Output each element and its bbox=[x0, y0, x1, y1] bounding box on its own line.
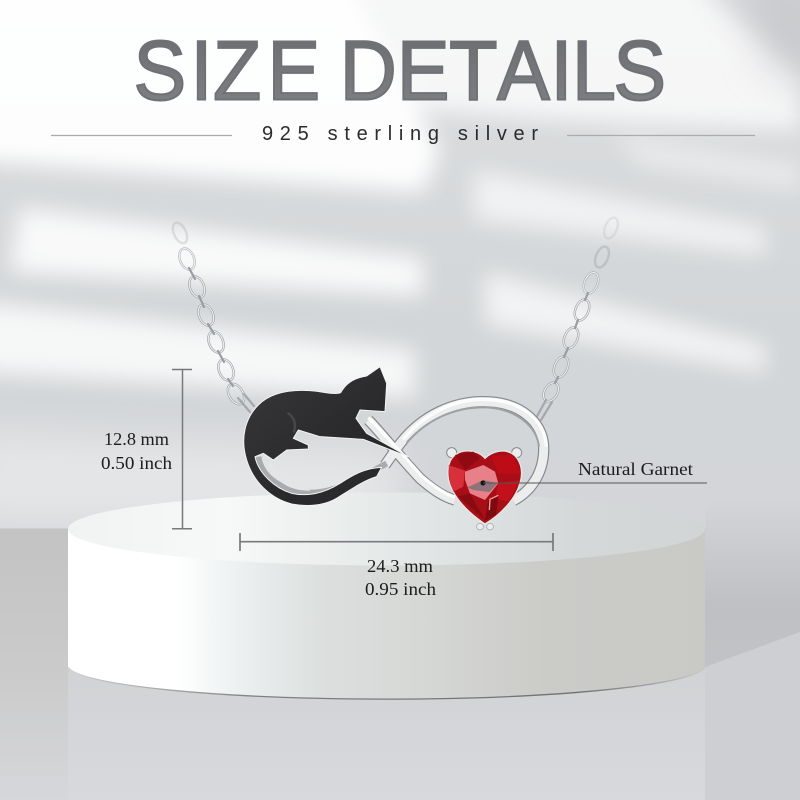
width dimension: 0.95 inch bbox=[365, 579, 436, 599]
width dimension: 24.3 mm bbox=[367, 556, 433, 576]
subtitle row: 925 sterling silver bbox=[262, 123, 538, 145]
infinity ring bbox=[258, 399, 546, 501]
stone callout: Natural Garnet bbox=[578, 459, 693, 479]
pendant bbox=[244, 367, 546, 506]
black cat bbox=[244, 367, 408, 506]
height dimension: 12.8 mm bbox=[104, 429, 169, 449]
height dimension bbox=[101, 370, 192, 529]
height dimension: 0.50 inch bbox=[101, 453, 172, 473]
right chain bbox=[536, 216, 621, 420]
floor bbox=[0, 500, 800, 800]
title: SIZE DETAILS bbox=[133, 24, 666, 118]
pedestal bbox=[68, 492, 705, 699]
necklace bbox=[170, 216, 621, 530]
left chain bbox=[170, 220, 254, 412]
cat shoulder shading bbox=[288, 413, 295, 432]
background wall with light streaks bbox=[0, 0, 800, 530]
garnet heart bbox=[447, 448, 522, 530]
stone callout bbox=[480, 459, 707, 486]
width dimension bbox=[240, 533, 553, 599]
